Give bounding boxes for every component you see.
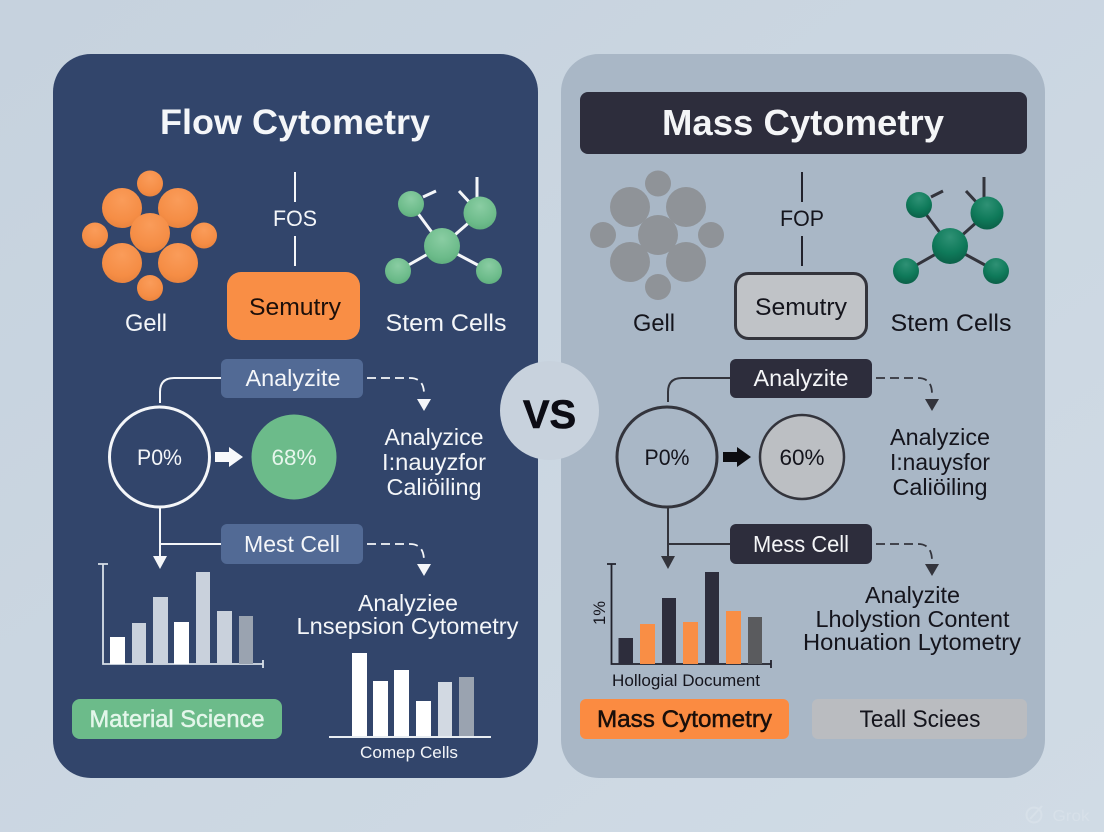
- bar chart: hollogial document: Hollogial Document: [612, 671, 760, 690]
- bar chart: comep cells: Comep Cells: [360, 743, 458, 762]
- heading: flow cytometry: Flow Cytometry: [160, 103, 431, 142]
- circle: p0%: [110, 407, 210, 507]
- text block: analyzite lholystion: Lholystion Content: [816, 606, 1010, 632]
- text block: analyzite lholystion: Analyzite: [865, 582, 960, 608]
- box: semutry: [227, 272, 360, 340]
- bar chart: left: [98, 564, 263, 668]
- box: analyzite with connectors: Analyzite: [246, 365, 340, 391]
- label: gell: Gell: [633, 310, 675, 337]
- circle: p0%: [617, 407, 717, 507]
- box: analyzite with connectors: [160, 359, 431, 411]
- text block: analyzice: [890, 424, 990, 500]
- box: semutry: [736, 274, 866, 338]
- circle: 68%: 68%: [272, 445, 316, 470]
- text block: analyzice: Analyzice: [384, 424, 484, 450]
- circle: 68%: [252, 414, 336, 500]
- box: semutry: Semutry: [755, 294, 847, 321]
- icon: green stem cell network: [385, 177, 502, 284]
- circle: 60%: 60%: [780, 445, 824, 470]
- tag: mass cytometry: [580, 699, 789, 739]
- circle: p0%: P0%: [137, 445, 182, 470]
- text block: analyzice: Analyzice: [890, 424, 990, 450]
- bar chart: comep cells: [329, 653, 491, 762]
- panel: mass cytometry: [561, 54, 1045, 778]
- heading: mass cytometry: [580, 92, 1027, 154]
- box: semutry: Semutry: [249, 294, 341, 321]
- circle: p0%: P0%: [644, 445, 690, 470]
- heading: mass cytometry: Mass Cytometry: [662, 102, 944, 143]
- watermark: grok: Grok: [1052, 808, 1091, 825]
- box: analyzite with connectors: [668, 359, 939, 411]
- label: gell: Gell: [125, 310, 167, 337]
- circle: 60%: [760, 415, 844, 499]
- icon: teal stem cell network: [893, 177, 1009, 284]
- panel: flow cytometry: [53, 54, 538, 778]
- box: mest cell with connectors: Mest Cell: [244, 531, 340, 557]
- bar chart: hollogial document: [590, 564, 771, 690]
- text block: analyzice: I:nauysfor: [890, 449, 990, 475]
- box: mess cell with connectors: Mess Cell: [753, 531, 849, 557]
- box: mest cell with connectors: [153, 507, 431, 576]
- tag: teall sciees: [812, 699, 1027, 739]
- tag: teall sciees: Teall Sciees: [860, 706, 980, 733]
- tag: material science: [72, 699, 282, 739]
- fop connector and label: [780, 172, 824, 266]
- text block: analyziee: [296, 590, 519, 639]
- vs badge: VS: [523, 393, 576, 437]
- icon: orange cell cluster: [82, 170, 217, 301]
- text block: analyzite lholystion: Honuation Lytometry: [803, 629, 1022, 655]
- box: mess cell with connectors: [661, 507, 939, 576]
- text block: analyzice: [382, 424, 486, 500]
- label: stem cells: Stem Cells: [386, 310, 506, 337]
- text block: analyziee: Analyziee: [358, 590, 458, 616]
- arrow: to result: [723, 447, 751, 467]
- text block: analyziee: Lnsepsion Cytometry: [296, 613, 519, 639]
- tag: material science: Material Science: [90, 706, 264, 733]
- text block: analyzice: Caliöiling: [892, 474, 988, 500]
- fos connector and label: FOS: [273, 206, 317, 231]
- label: stem cells: Stem Cells: [890, 310, 1012, 337]
- fos connector and label: [273, 172, 317, 266]
- text block: analyzite lholystion: [803, 582, 1022, 655]
- text block: analyzice: I:nauyzfor: [382, 449, 486, 475]
- text block: analyzice: Caliöiling: [386, 474, 482, 500]
- bar chart: hollogial document: 1%: [590, 601, 609, 625]
- box: analyzite with connectors: Analyzite: [754, 365, 848, 391]
- vs badge: [500, 361, 599, 460]
- tag: mass cytometry: Mass Cytometry: [597, 706, 772, 733]
- fop connector and label: FOP: [780, 206, 824, 231]
- arrow: to result: [215, 447, 243, 467]
- watermark: grok: [1026, 806, 1091, 825]
- icon: grey cell cluster: [590, 170, 724, 300]
